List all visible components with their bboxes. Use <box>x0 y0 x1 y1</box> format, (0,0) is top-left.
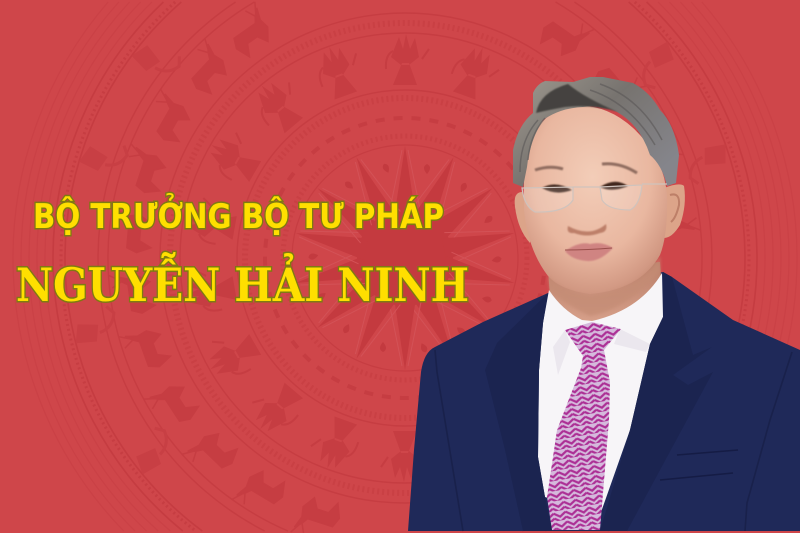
portrait: neck <box>548 262 662 322</box>
portrait: hair strands <box>520 84 662 172</box>
background: dancers band <box>180 34 504 482</box>
portrait: ear left <box>515 192 534 243</box>
background: deer and birds band <box>109 2 701 533</box>
background: inner drum rings <box>160 13 650 503</box>
portrait: dark hair swoop <box>536 84 618 113</box>
portrait: pocket <box>660 450 738 480</box>
portrait: face <box>524 106 667 294</box>
title: position: BỘ TRƯỞNG BỘ TƯ PHÁP <box>33 193 444 237</box>
portrait: eyes <box>542 182 628 193</box>
portrait: collar shadow <box>553 329 650 375</box>
portrait: eyebrows <box>535 164 637 173</box>
portrait: shirt <box>538 273 663 515</box>
portrait: tie <box>547 322 621 530</box>
portrait: glasses <box>522 184 667 212</box>
portrait: chin shadow <box>548 256 660 316</box>
portrait: hair <box>513 77 679 187</box>
portrait: nose <box>568 224 606 236</box>
portrait: ear right <box>664 184 685 238</box>
portrait: mouth <box>565 243 613 261</box>
background: outer flags and birds <box>69 33 735 477</box>
background: drum star <box>290 146 520 370</box>
portrait: minister <box>408 77 800 531</box>
portrait: sleeve seams <box>435 350 792 531</box>
portrait: jacket <box>408 272 800 531</box>
portrait: lapels <box>485 272 713 531</box>
title: name: NGUYỄN HẢI NINH <box>16 251 469 312</box>
